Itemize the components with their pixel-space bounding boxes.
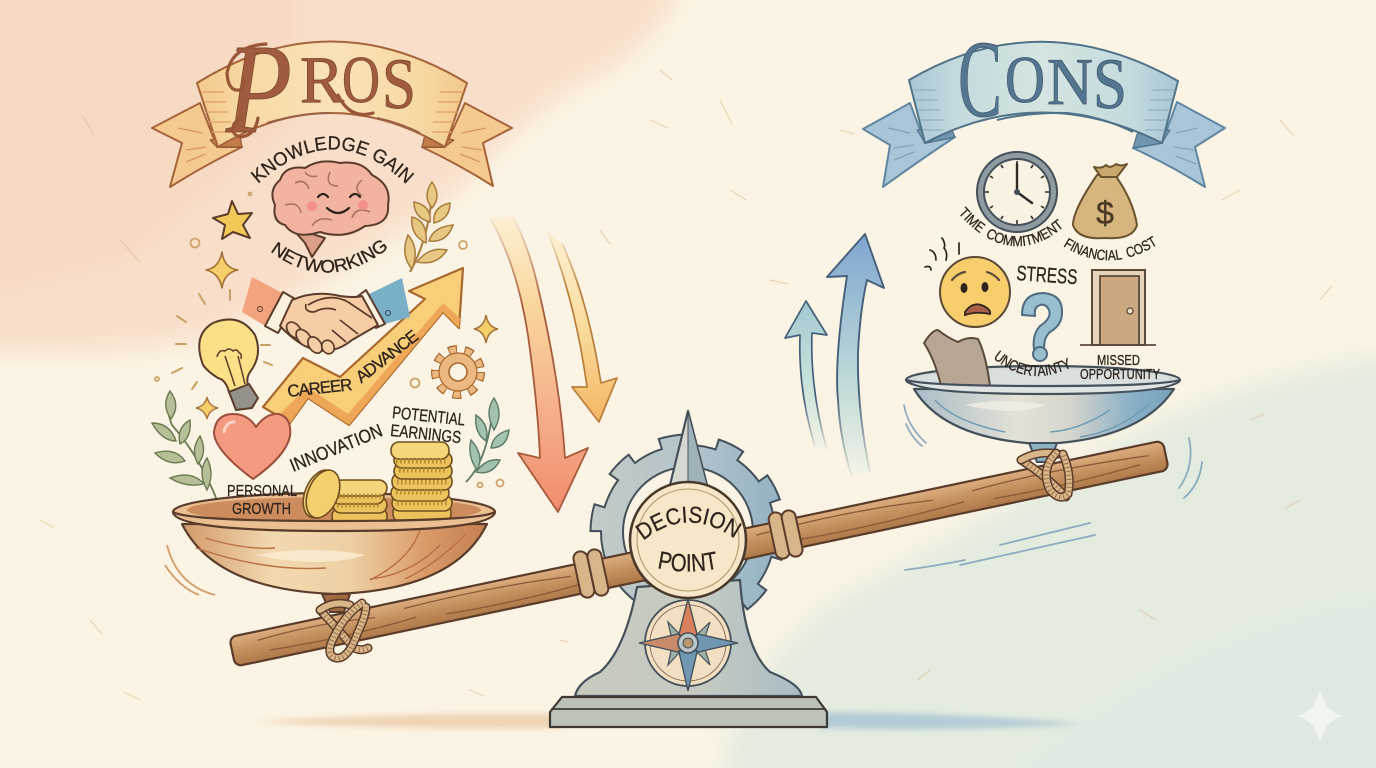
bowl front lip [907, 380, 1180, 394]
label: stress: STRESS [1016, 262, 1078, 289]
panel: cons bowl [903, 329, 1203, 571]
gear ring [598, 442, 778, 622]
panel: pros items [150, 136, 510, 498]
bowl interior [917, 369, 1169, 387]
beam: wooden lever [229, 440, 1169, 667]
icon: question mark [1022, 293, 1062, 361]
label: innovation: INNOVATION [287, 420, 385, 476]
decorative dots [155, 192, 504, 488]
compass [639, 599, 738, 691]
banner tails [863, 102, 1225, 187]
panel: pros banner [152, 18, 512, 187]
label: missed opportunity [1080, 353, 1160, 383]
motion lines [904, 405, 1202, 570]
spike [670, 411, 707, 485]
panel: fulcrum stand [550, 411, 827, 727]
title: Pros: O [342, 43, 380, 117]
label: decision point [635, 506, 742, 572]
bowl back rim [906, 366, 1180, 394]
label: personal growth: GROWTH [232, 501, 291, 518]
label: potential earnings [389, 403, 466, 447]
title: Cons: N [1047, 45, 1093, 119]
ground shadow [250, 712, 1085, 729]
label: decision point: POINT [658, 551, 716, 572]
arrow: small orange down [548, 233, 617, 422]
hub ring [637, 489, 739, 591]
coin stacks [297, 442, 452, 525]
title: Pros: R [300, 43, 344, 117]
icon: small sparkle [196, 397, 218, 419]
banner underline [997, 113, 1133, 132]
arrow: large blue up [827, 234, 884, 477]
panel: decision hub [572, 480, 804, 600]
label: decision point: DECISION [635, 506, 742, 540]
label: potential earnings: EARNINGS [389, 421, 462, 447]
panel: cons items [924, 151, 1156, 362]
icon: gear [436, 350, 480, 394]
icon: worried face [925, 238, 1010, 327]
base [550, 697, 827, 727]
label: financial cost: FINANCIAL COST [1064, 236, 1156, 260]
icon: clock [977, 152, 1057, 232]
label: career advance: CAREER ADVANCE [288, 329, 420, 397]
label: missed opportunity: OPPORTUNITY [1080, 366, 1160, 383]
motion lines [165, 545, 215, 595]
icon: brain [272, 161, 389, 257]
rope: pros knot [320, 603, 368, 658]
banner hatching [914, 90, 1174, 130]
title: Pros [225, 18, 416, 160]
banner hatching [202, 92, 462, 132]
rope left [572, 548, 610, 599]
title: Cons: C [958, 18, 1002, 140]
banner band [909, 42, 1178, 143]
icon: light bulb [172, 290, 272, 410]
rope right [767, 509, 804, 560]
icon: money bag [1073, 164, 1137, 238]
label: time commitment: TIME COMMITMENT [960, 206, 1062, 246]
icon: heart [214, 414, 290, 479]
icon: star [213, 201, 252, 239]
title: Pros: S [382, 44, 416, 124]
label: uncertainty: UNCERTAINTY [994, 350, 1069, 376]
panel: cons banner [863, 18, 1225, 187]
icon: watermark sparkle [1296, 688, 1344, 744]
label: potential earnings: POTENTIAL [391, 403, 466, 430]
arrow: small blue up [785, 301, 827, 450]
bowl body [914, 389, 1174, 444]
bowl back rim [173, 493, 495, 531]
icon: right sprig [466, 398, 509, 482]
icon: career arrow [262, 266, 464, 426]
icon: door [1080, 270, 1156, 345]
hub [630, 482, 746, 598]
bowl body [182, 524, 487, 594]
label: knowledge gain: KNOWLEDGE GAIN [250, 136, 414, 184]
icon: rock [924, 330, 990, 386]
panel: pros bowl [165, 442, 495, 612]
bowl front lip [173, 512, 495, 531]
icon: money bag: $ [1096, 195, 1114, 231]
rope: cons knot [1021, 453, 1069, 497]
label: networking: NETWORKING [271, 240, 387, 273]
arrow: large red down [490, 217, 588, 512]
banner underline [267, 113, 420, 133]
icon: sparkle right [474, 315, 498, 343]
icon: handshake [242, 277, 410, 356]
stand body [575, 580, 802, 696]
label: personal growth [227, 483, 297, 518]
icon: sparkle [206, 252, 238, 288]
banner tails [152, 103, 512, 187]
icon: laurel top [405, 182, 453, 272]
label: missed opportunity: MISSED [1097, 353, 1140, 369]
title: Cons: O [1005, 43, 1045, 117]
banner band [197, 42, 467, 147]
bowl interior [187, 497, 481, 523]
title: Cons: S [1093, 44, 1127, 124]
icon: left sprig [152, 391, 218, 503]
title: Pros: P [225, 18, 292, 160]
label: personal growth: PERSONAL [227, 483, 297, 500]
title: Cons [958, 18, 1127, 140]
